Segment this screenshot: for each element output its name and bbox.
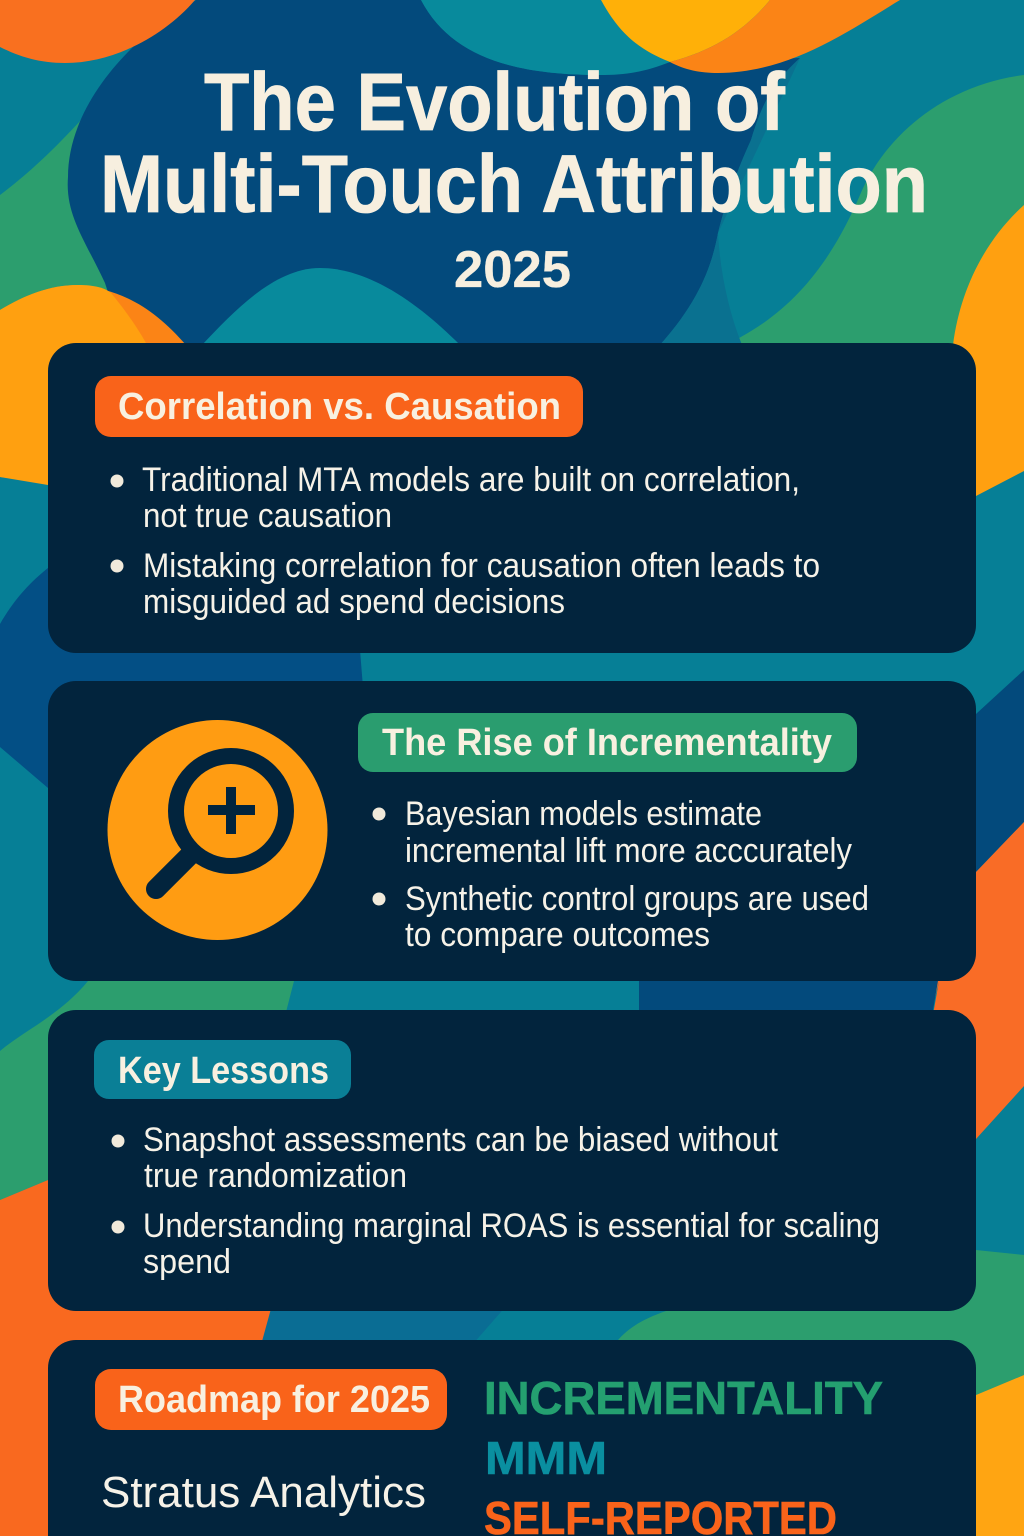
heading pill: correlation vs causation: Correlation vs. Causation [118,386,561,428]
title: Multi-Touch Attribution [100,139,928,230]
bullet list: key lessons: true randomization [144,1157,407,1195]
bullet list: key lessons: spend [143,1243,231,1281]
bullet list: key lessons: Understanding marginal ROAS is essential for scaling [143,1207,880,1245]
bullet list: incrementality [372,795,869,954]
panel: roadmap for 2025 [48,1340,976,1536]
title [100,57,928,299]
panel: correlation vs causation [48,343,976,653]
bullet list: correlation: not true causation [143,497,392,535]
heading pill: rise of incrementality [358,713,857,772]
title: The Evolution of [204,57,786,148]
icon: magnifying glass with plus [108,720,328,940]
heading pill: key lessons: Key Lessons [118,1050,329,1092]
heading pill: correlation vs causation [95,376,583,437]
bullet list: key lessons [112,1121,880,1281]
keyword list: INCREMENTALITY [484,1372,883,1424]
bullet list: incrementality: to compare outcomes [405,916,710,954]
bullet list: incrementality: incremental lift more acccurately [405,832,852,870]
bullet list: key lessons: Snapshot assessments can be biased without [143,1121,778,1159]
bullet list: correlation: Traditional MTA models are built on correlation, [142,461,800,499]
heading pill: key lessons [94,1040,351,1099]
brand name: Stratus Analytics [101,1468,426,1517]
title: 2025 [454,241,571,299]
heading pill: rise of incrementality: The Rise of Incrementality [382,722,832,764]
bullet list: correlation: Mistaking correlation for causation often leads to [143,547,820,585]
bullet list: correlation: misguided ad spend decisions [143,583,565,621]
bullet list: correlation [110,461,820,621]
bullet list: incrementality: Synthetic control groups are used [405,880,869,918]
heading pill: roadmap: Roadmap for 2025 [118,1379,430,1421]
keyword list: MMM [485,1432,607,1484]
panel: rise of incrementality [48,681,976,981]
panel: key lessons [48,1010,976,1311]
keyword list [484,1372,883,1536]
heading pill: roadmap [95,1369,447,1430]
bullet list: incrementality: Bayesian models estimate [405,795,762,833]
